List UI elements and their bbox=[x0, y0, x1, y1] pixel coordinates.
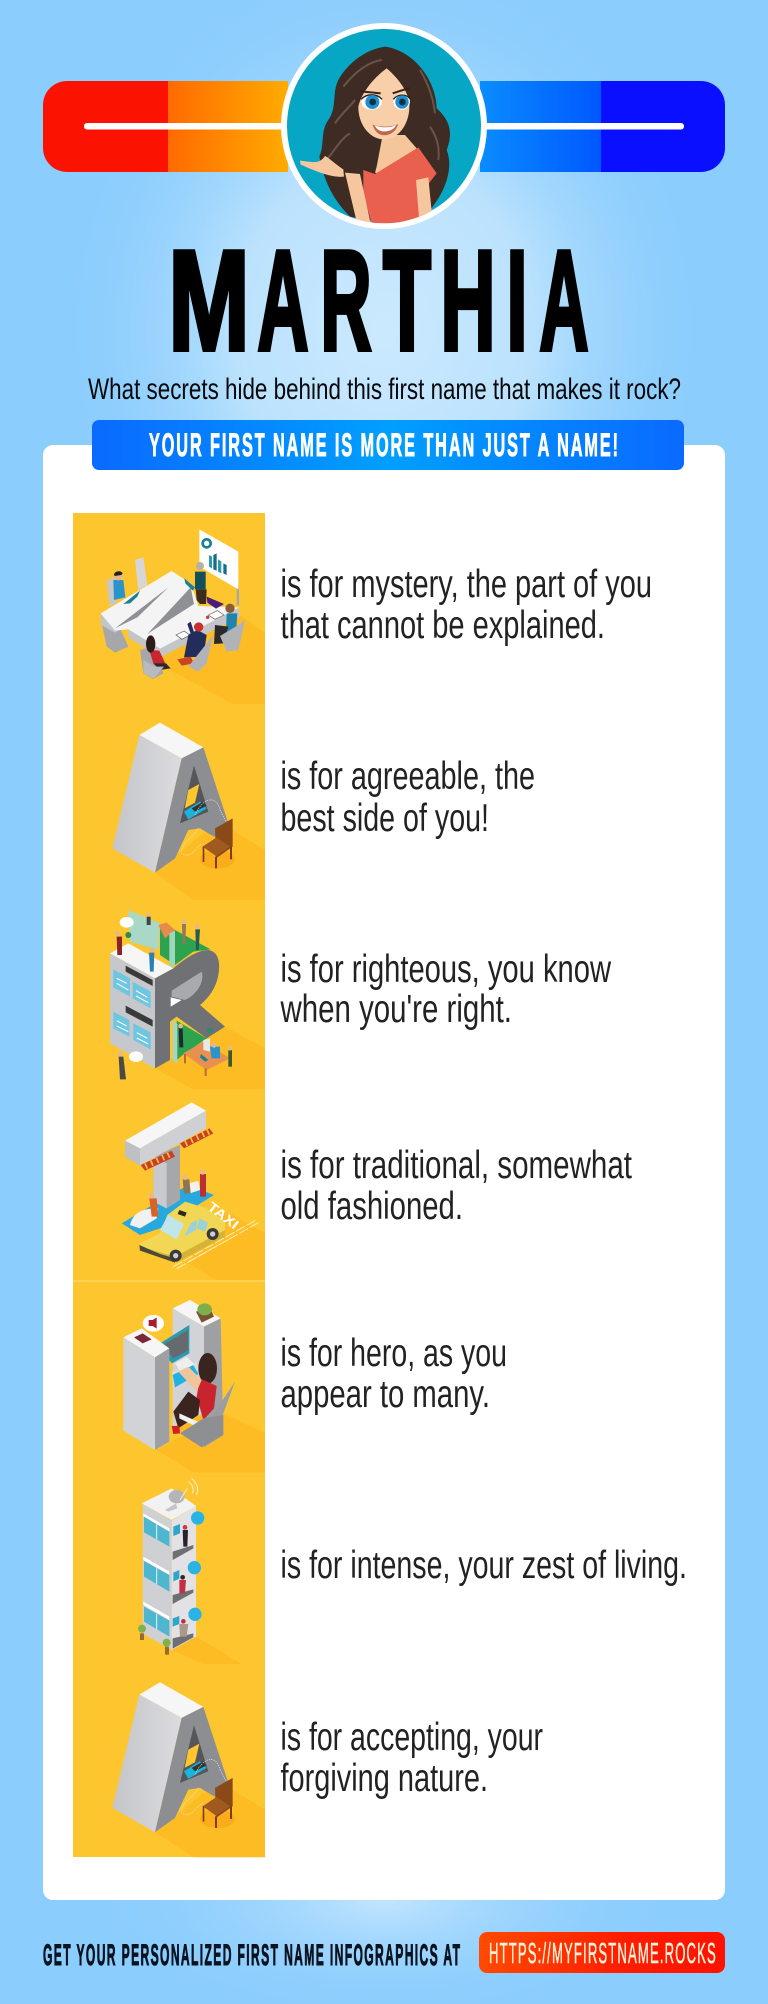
icon: letter T taxi stand: TAXI bbox=[205, 1199, 242, 1232]
text: A line bbox=[280, 755, 535, 840]
text: H line: is for hero, as you bbox=[280, 1332, 507, 1375]
text: M line: is for mystery, the part of you bbox=[280, 563, 652, 606]
text: final A line: forgiving nature. bbox=[280, 1757, 488, 1800]
title: A bbox=[258, 222, 308, 380]
icon: letter T taxi stand bbox=[122, 1102, 265, 1280]
text: final A line: is for accepting, your bbox=[280, 1716, 543, 1759]
icon: letter H desk bbox=[123, 1300, 265, 1473]
title: R bbox=[320, 222, 372, 380]
text: R line: when you're right. bbox=[280, 988, 512, 1031]
title: M bbox=[168, 222, 250, 380]
text: T line bbox=[280, 1144, 632, 1228]
infographic canvas: A bbox=[540, 222, 588, 380]
text: T line: old fashioned. bbox=[280, 1185, 463, 1228]
text: M line: that cannot be explained. bbox=[280, 604, 605, 647]
panel: white content bbox=[43, 445, 725, 1900]
text: H line: appear to many. bbox=[280, 1373, 490, 1416]
text: R line: is for righteous, you know bbox=[280, 948, 612, 991]
icon: letter M meeting table bbox=[101, 529, 265, 704]
footer call to action: GET YOUR PERSONALIZED FIRST NAME INFOGRAPHICS AT bbox=[43, 1939, 460, 1972]
text: final A line bbox=[280, 1716, 543, 1800]
text: A line: best side of you! bbox=[280, 797, 489, 840]
panel: yellow illustration column bbox=[73, 513, 265, 1857]
text: A line: is for agreeable, the bbox=[280, 755, 535, 798]
text: T line: is for traditional, somewhat bbox=[280, 1144, 632, 1187]
banner: YOUR FIRST NAME IS MORE THAN JUST A NAME! bbox=[149, 428, 618, 464]
title: H bbox=[440, 222, 496, 380]
title: T bbox=[383, 222, 431, 380]
text: M line bbox=[280, 563, 652, 647]
top colour bar bbox=[43, 81, 725, 172]
icon: final letter A with chair bbox=[112, 1682, 265, 1857]
avatar portrait bbox=[281, 23, 487, 229]
text: R line bbox=[280, 948, 612, 1031]
icon: letter A with chair bbox=[112, 723, 265, 900]
title: I bbox=[506, 222, 528, 380]
icon: letter R building bbox=[110, 910, 265, 1089]
text: H line bbox=[280, 1332, 507, 1416]
banner bbox=[92, 420, 684, 470]
icon: letter I tower bbox=[138, 1478, 242, 1664]
footer url button: HTTPS://MYFIRSTNAME.ROCKS bbox=[489, 1937, 716, 1969]
